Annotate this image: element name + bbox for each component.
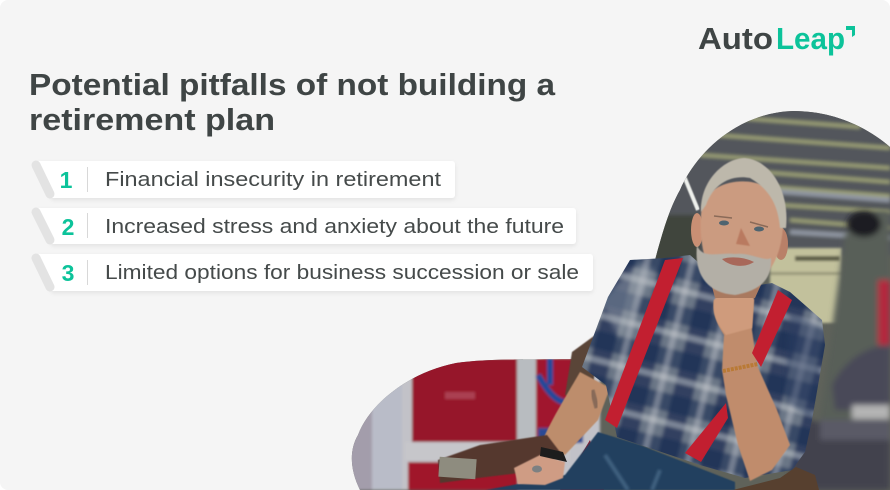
logo: AutoLeap: Leap — [776, 21, 845, 56]
wall — [770, 248, 842, 323]
photo: workshop background — [340, 100, 890, 490]
item 2: Increased stress and anxiety about the future — [105, 216, 564, 238]
eyes — [719, 220, 729, 226]
item 3 — [36, 254, 593, 291]
hair — [701, 158, 787, 228]
logo: AutoLeap: Auto — [698, 21, 773, 56]
armrest — [438, 435, 560, 483]
beard — [697, 245, 771, 295]
item 3: Limited options for business succession or sale — [105, 262, 579, 284]
right suspender — [752, 290, 792, 367]
lips — [722, 257, 754, 266]
title: retirement plan — [29, 102, 275, 137]
watch — [540, 447, 567, 462]
nose — [736, 228, 750, 246]
item 1: Financial insecurity in retirement — [105, 169, 442, 191]
man with suspenders — [438, 158, 835, 490]
item 1 — [36, 161, 455, 198]
ceiling light streak — [684, 176, 698, 210]
shop shelves — [352, 359, 602, 490]
ring — [532, 466, 542, 472]
jeans — [486, 432, 735, 490]
chair right — [733, 467, 819, 490]
armrest metal cap — [438, 457, 477, 479]
bracelet — [723, 364, 758, 371]
hand — [514, 455, 565, 485]
left arm — [540, 372, 610, 455]
car at right — [790, 211, 890, 490]
chair back — [564, 335, 595, 396]
neck — [712, 284, 762, 298]
ears — [691, 213, 703, 247]
logo: AutoLeap — [698, 21, 855, 56]
fist — [714, 292, 754, 335]
item 2 — [36, 208, 576, 244]
face — [701, 181, 783, 280]
item 1: 1 — [60, 167, 73, 193]
item 3: 3 — [62, 260, 74, 286]
title: Potential pitfalls of not building a — [29, 67, 556, 102]
right arm — [714, 297, 790, 481]
tattoo — [592, 390, 597, 408]
left suspender — [605, 258, 683, 428]
shirt — [582, 255, 825, 478]
brows — [714, 216, 768, 227]
item 2: 2 — [62, 214, 74, 240]
ceiling — [655, 111, 890, 261]
title — [29, 67, 556, 137]
